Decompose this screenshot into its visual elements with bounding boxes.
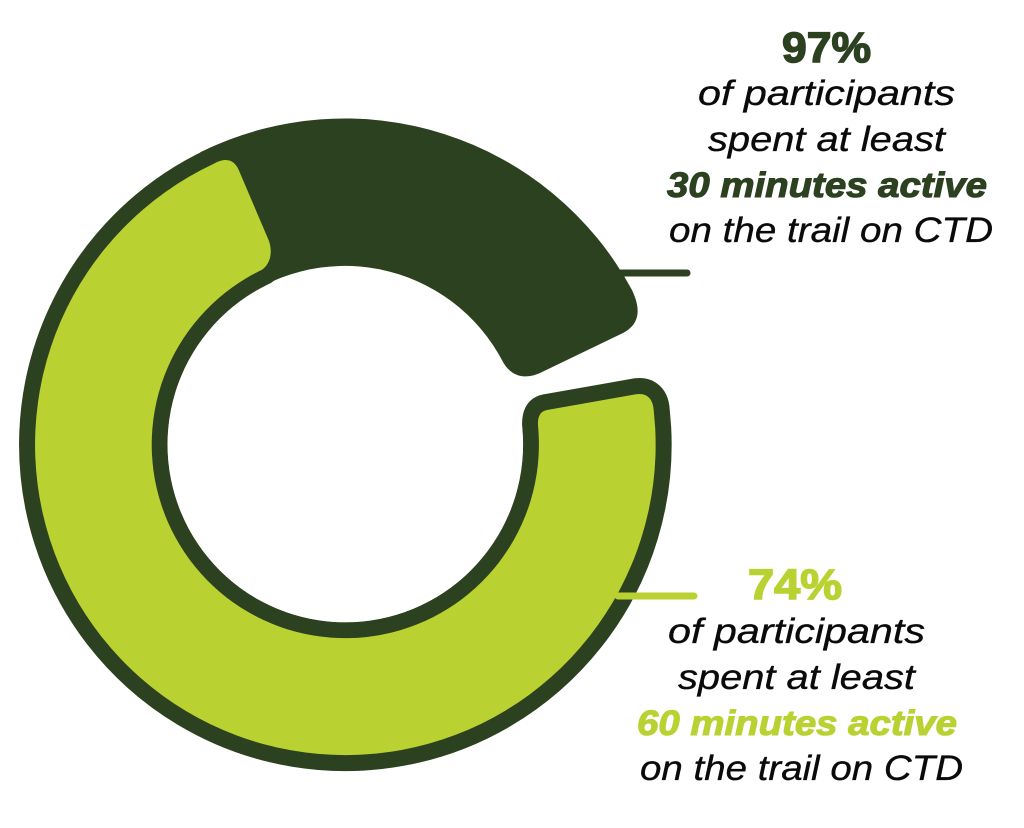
donut chart bbox=[35, 118, 694, 755]
line: on the trail on CTD: on the trail on CTD bbox=[640, 749, 963, 788]
stat: 97%: 97% bbox=[782, 24, 871, 72]
line: of participants: of participants bbox=[668, 612, 925, 651]
emphasis: 60 minutes active: 60 minutes active bbox=[637, 704, 957, 743]
leader line: 74% bbox=[618, 592, 694, 600]
dark segment: 97% bbox=[200, 118, 638, 376]
green segment: 74% bbox=[35, 160, 656, 755]
line: spent at least: spent at least bbox=[708, 120, 946, 159]
emphasis: 30 minutes active: 30 minutes active bbox=[667, 166, 987, 205]
callout: 97% bbox=[667, 24, 993, 250]
line: spent at least: spent at least bbox=[678, 658, 916, 697]
callout: 74% bbox=[637, 561, 963, 788]
line: of participants: of participants bbox=[698, 74, 955, 113]
leader line: 97% bbox=[615, 270, 687, 276]
donut hole bbox=[167, 267, 523, 622]
line: on the trail on CTD: on the trail on CTD bbox=[669, 211, 993, 250]
stat: 74%: 74% bbox=[748, 561, 842, 609]
